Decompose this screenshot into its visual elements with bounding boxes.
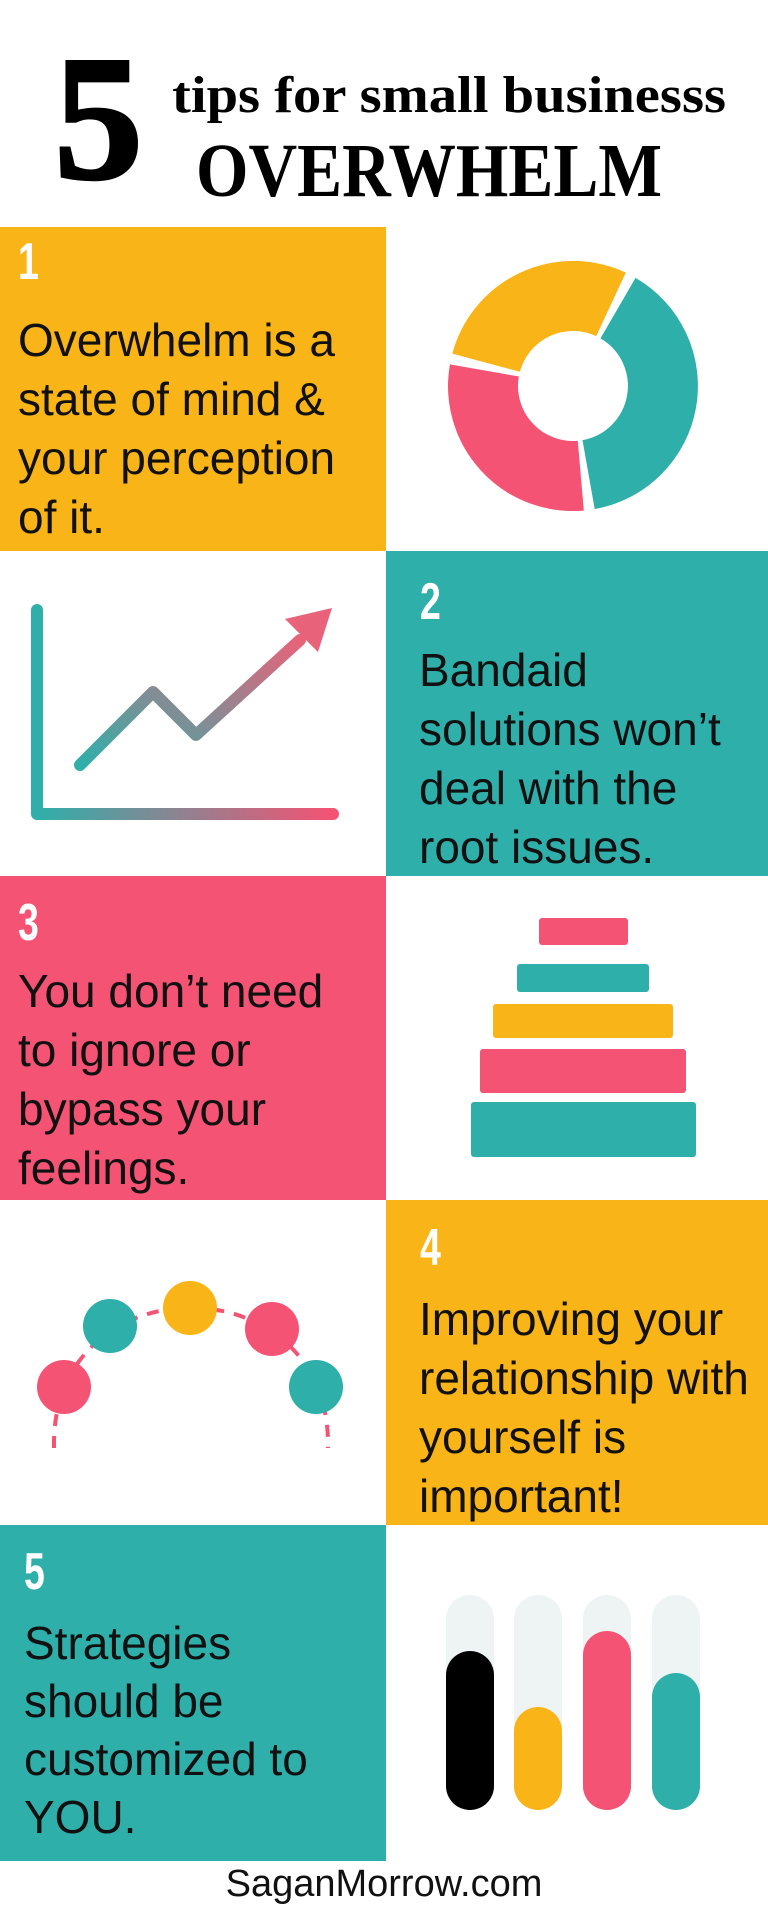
text tip 3 <box>18 965 323 1194</box>
text tip 5: customized to <box>24 1733 308 1785</box>
text tip 4: Improving your <box>419 1293 723 1345</box>
text tip 1: Overwhelm is a <box>18 314 335 366</box>
number 2: 2 <box>420 573 441 631</box>
panel: tip 4 <box>386 1200 768 1525</box>
text tip 2: deal with the <box>419 762 677 814</box>
text tip 3: feelings. <box>18 1142 189 1194</box>
number 5: 5 <box>24 1543 45 1601</box>
text tip 2 <box>419 644 721 873</box>
panel: tip 5 <box>0 1525 386 1861</box>
text tip 3: bypass your <box>18 1083 266 1135</box>
title: big 5: 5 <box>54 19 143 217</box>
title <box>54 19 726 217</box>
text tip 2: solutions won’t <box>419 703 721 755</box>
icon: dotted arc of circles <box>37 1281 343 1448</box>
number 1: 1 <box>18 233 39 291</box>
text tip 2: root issues. <box>419 821 654 873</box>
text tip 3: You don’t need <box>18 965 323 1017</box>
panel: tip 2 <box>386 551 768 876</box>
text tip 1 <box>18 314 335 543</box>
title: subtitle line: tips for small businesss <box>172 67 726 124</box>
text tip 1: your perception <box>18 432 335 484</box>
text tip 4 <box>419 1293 749 1522</box>
title: OVERWHELM: OVERWHELM <box>196 129 662 213</box>
text tip 5: YOU. <box>24 1791 136 1843</box>
icon: growth line chart <box>31 604 339 820</box>
icon: donut cycle <box>448 261 698 511</box>
text tip 2: Bandaid <box>419 644 588 696</box>
text tip 4: yourself is <box>419 1411 626 1463</box>
number 4: 4 <box>420 1219 441 1277</box>
text tip 5: should be <box>24 1675 224 1727</box>
text tip 5: Strategies <box>24 1617 231 1669</box>
text tip 3: to ignore or <box>18 1024 251 1076</box>
text tip 4: important! <box>419 1470 624 1522</box>
number 3: 3 <box>18 894 39 952</box>
text tip 1: of it. <box>18 491 105 543</box>
text tip 1: state of mind & <box>18 373 325 425</box>
text tip 4: relationship with <box>419 1352 749 1404</box>
icon: progress bars <box>446 1595 700 1810</box>
panel: tip 1 <box>0 227 386 551</box>
icon: stacked bars pyramid <box>471 918 696 1157</box>
footer: website: SaganMorrow.com <box>226 1863 542 1905</box>
text tip 5 <box>24 1617 308 1843</box>
panel: tip 3 <box>0 876 386 1200</box>
